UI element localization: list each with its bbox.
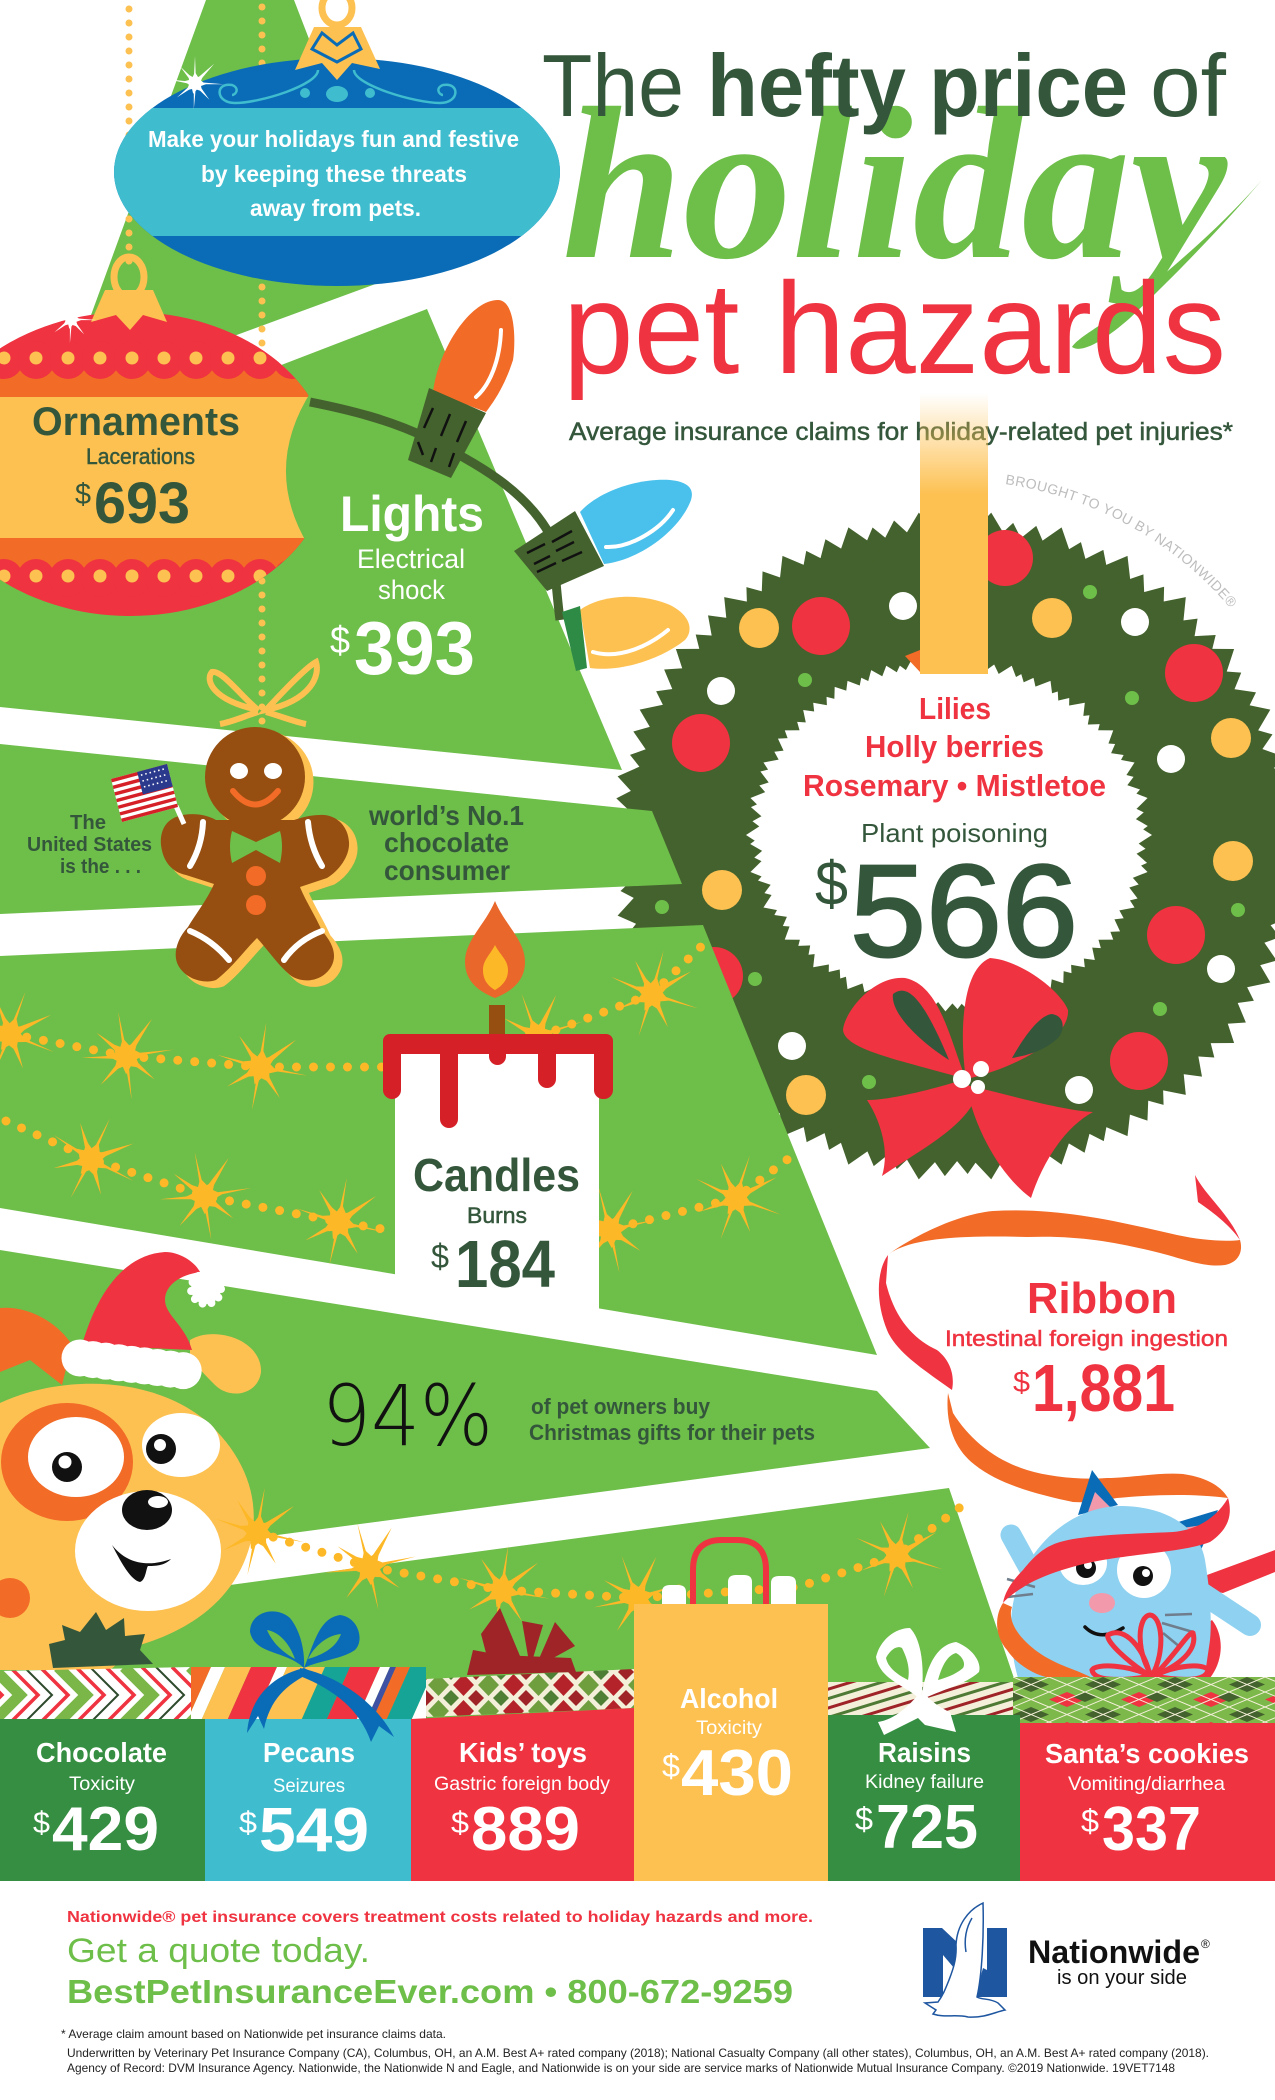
title word: holiday: holiday	[562, 64, 1228, 305]
fact text right: world’s No.1	[368, 800, 524, 831]
stat caption: of pet owners buy	[531, 1394, 711, 1419]
tree notch over ornament	[286, 390, 340, 545]
wreath hanging ribbon	[920, 393, 988, 674]
panel: chocolate	[0, 1719, 205, 1881]
lights wire	[310, 402, 560, 620]
panel: kids toys: Kids’ toys	[459, 1737, 587, 1768]
lights text: 393	[354, 606, 475, 690]
ribbon text: $	[1013, 1366, 1030, 1399]
panel: alcohol: $	[662, 1748, 680, 1784]
icon: bag handle	[693, 1540, 766, 1604]
cat body	[1011, 1506, 1211, 1678]
candle body	[395, 1038, 599, 1344]
ornament ring	[322, 0, 352, 25]
panel: chocolate: 429	[52, 1795, 159, 1864]
panel: raisins: $	[855, 1801, 873, 1837]
ornament body	[0, 312, 330, 616]
panel: alcohol: 430	[681, 1736, 793, 1809]
cat ears	[1078, 1470, 1218, 1557]
logo eagle	[925, 1903, 1005, 2017]
title line: The hefty price of: of	[1150, 36, 1227, 135]
panel: pecans: Seizures	[273, 1776, 345, 1797]
plant poisoning text: Rosemary • Mistletoe	[803, 768, 1106, 803]
dog left ear	[0, 1308, 72, 1385]
fact text right	[368, 800, 524, 886]
garlands with stars	[0, 937, 800, 1284]
ribbon text: 1,881	[1032, 1351, 1175, 1426]
candle text: 184	[455, 1227, 555, 1302]
panel: ribbon	[879, 1175, 1241, 1502]
alcohol box	[634, 1604, 828, 1881]
stat caption: Christmas gifts for their pets	[529, 1420, 815, 1445]
icon: sparkle	[169, 56, 224, 109]
logo N mark	[923, 1928, 1007, 1997]
plant poisoning text: Plant poisoning	[861, 818, 1048, 848]
panel: alcohol: Alcohol	[680, 1683, 778, 1714]
ornament message	[148, 126, 519, 221]
footer call to action: Nationwide® pet insurance covers treatment costs related to holiday hazards and more.	[67, 1909, 813, 1926]
title line: pet hazards: pet hazards	[563, 255, 1226, 401]
cat red ribbon behind	[1200, 1550, 1275, 1678]
ribbon red bend	[879, 1255, 953, 1390]
chevron wrap	[0, 1667, 191, 1723]
footer disclaimers: Agency of Record: DVM Insurance Agency. Nationwide, the Nationwide N and Eagle, and Nationwide is on your side are service marks of Nationwide Mutual Insurance Company. ©2019 Nationwide. 19VET7148	[67, 2061, 1175, 2075]
title	[542, 36, 1262, 401]
panel: pecans: $	[239, 1805, 257, 1840]
title line: The hefty price of	[542, 36, 1227, 135]
cat red bow	[1092, 1615, 1208, 1679]
stat caption	[529, 1394, 815, 1445]
ribbon text	[945, 1274, 1228, 1426]
footer call to action: BestPetInsuranceEver.com • 800-672-9259	[67, 1973, 793, 2010]
panel: gift stat	[322, 1367, 815, 1465]
icon: white gift bow	[876, 1628, 980, 1735]
ornament text: $	[75, 478, 91, 511]
panel: pecans: Pecans	[263, 1737, 355, 1768]
fact text left: United States	[27, 834, 152, 856]
icon: yellow bow	[210, 662, 317, 724]
footer logo	[923, 1903, 1210, 2017]
panel: santas cookies: 337	[1102, 1795, 1201, 1864]
fact text right: consumer	[384, 855, 510, 886]
panel: santas cookies: Santa’s cookies	[1045, 1738, 1249, 1769]
panel: pecans	[205, 1719, 411, 1881]
panel: chocolate: Chocolate	[36, 1737, 167, 1768]
gift wrap strips	[0, 1667, 1275, 1727]
candle wick	[489, 1005, 505, 1037]
icon: gingerbread man	[161, 727, 356, 986]
lights text: $	[330, 620, 350, 662]
icon: bottle tops	[662, 1575, 796, 1604]
panel: alcohol: Toxicity	[696, 1718, 763, 1739]
icon: candle flame	[465, 901, 525, 998]
fact text right: chocolate	[384, 827, 509, 858]
subtitle: Average insurance claims for holiday-related pet injuries*	[569, 418, 1233, 446]
panel: raisins: Kidney failure	[865, 1772, 984, 1793]
ornament cap	[91, 290, 167, 330]
panel: blue ornament	[110, 0, 565, 290]
ornament swirls	[220, 70, 455, 103]
ribbon text: Intestinal foreign ingestion	[945, 1326, 1228, 1351]
illustration: dog	[0, 1252, 261, 1670]
ribbon upper band	[888, 1210, 1241, 1266]
plant poisoning text: Lilies	[919, 691, 991, 726]
candle text: Burns	[467, 1203, 527, 1228]
ornament text: 693	[94, 471, 190, 536]
panel: raisins	[828, 1715, 1020, 1881]
ornament text	[32, 400, 240, 536]
panel: chocolate: $	[33, 1805, 50, 1840]
ornament text: Lacerations	[86, 444, 195, 469]
ribbon text: Ribbon	[1027, 1274, 1177, 1323]
logo wordmark: ®	[1201, 1937, 1210, 1951]
cat wrapping ribbon	[997, 1498, 1230, 1678]
stat number: 94%	[322, 1367, 493, 1465]
dog cheek	[0, 1578, 30, 1618]
icon: blue bulb	[514, 480, 692, 591]
dark spiky bow	[49, 1612, 153, 1668]
candle text	[413, 1149, 580, 1302]
footer call to action	[67, 1909, 813, 2010]
panel: raisins: Raisins	[878, 1737, 971, 1768]
dog muzzle	[75, 1490, 221, 1611]
striped wrap	[191, 1667, 426, 1719]
ribbon lower band	[947, 1393, 1228, 1502]
footer disclaimers: * Average claim amount based on Nationwide pet insurance claims data.	[61, 2027, 446, 2041]
icon: yellow bulb	[562, 597, 690, 671]
raisin stripe wrap	[827, 1682, 1017, 1718]
dog eyes	[1, 1403, 220, 1521]
argyle wrap	[1013, 1677, 1275, 1723]
ornament cap	[295, 27, 380, 80]
cat arms	[1011, 1535, 1250, 1625]
ornament ring	[114, 257, 144, 297]
ornament message: away from pets.	[250, 195, 421, 221]
panel: candle	[383, 901, 613, 1344]
lights text	[330, 486, 484, 690]
panel: chocolate: Toxicity	[69, 1774, 136, 1795]
ornament message: Make your holidays fun and festive	[148, 126, 519, 152]
wreath centre	[727, 634, 1171, 1036]
panel: raisins: 725	[876, 1793, 978, 1862]
plant poisoning text: 566	[850, 837, 1078, 984]
ornament message: by keeping these threats	[201, 161, 467, 187]
plant poisoning text	[803, 691, 1106, 984]
vertical dotted garlands	[129, 7, 262, 726]
candle text: Candles	[413, 1149, 580, 1201]
sponsor arc text: BROUGHT TO YOU BY NATIONWIDE®	[1006, 474, 1236, 606]
icon: sparkle	[47, 294, 97, 343]
panel: red ornament	[0, 257, 340, 616]
cat nose and mouth	[1007, 1579, 1193, 1647]
icon: dark red gift bow	[467, 1608, 576, 1675]
panel: alcohol	[634, 1540, 828, 1881]
footer disclaimers: Underwritten by Veterinary Pet Insurance Company (CA), Columbus, OH, an A.M. Best A+ rated company (2018); National Casualty Company (all other states), Columbus, OH, an A.M. Best A+ rated company (2018).	[67, 2046, 1209, 2060]
dog santa hat	[80, 1252, 221, 1371]
fact text left: is the . . .	[60, 856, 141, 878]
lights text: Lights	[340, 486, 484, 542]
panel: pecans: 549	[259, 1796, 369, 1865]
plant poisoning text: Holly berries	[865, 729, 1044, 764]
lights text: shock	[378, 575, 445, 605]
bottom garland	[206, 1480, 963, 1654]
panel: gingerbread fact	[27, 662, 524, 986]
panel: kids toys: $	[451, 1805, 469, 1840]
fact text left	[27, 812, 152, 878]
candle wax	[383, 1034, 613, 1128]
ornament body	[110, 55, 565, 290]
logo wordmark: Nationwide	[1028, 1934, 1200, 1970]
panel: santas cookies	[1020, 1723, 1275, 1881]
lights text: Electrical	[357, 544, 465, 574]
fact text left: The	[70, 812, 106, 834]
panel: lights	[310, 300, 692, 690]
ribbon red tip	[1195, 1175, 1240, 1240]
title line: The hefty price of: hefty price	[707, 36, 1128, 135]
panel: santas cookies: Vomiting/diarrhea	[1068, 1774, 1225, 1795]
illustration: cat	[997, 1470, 1275, 1679]
wreath	[571, 473, 1275, 1219]
icon: orange bulb	[408, 300, 514, 478]
logo tagline: is on your side	[1057, 1967, 1187, 1989]
dog head	[0, 1384, 254, 1670]
dog right ear	[190, 1334, 261, 1394]
panel: kids toys: 889	[471, 1795, 580, 1864]
footer disclaimers	[61, 2027, 1209, 2075]
wreath berries	[655, 530, 1253, 1115]
icon: american flag	[111, 764, 184, 824]
panel: kids toys: Gastric foreign body	[434, 1774, 611, 1795]
footer call to action: Get a quote today.	[67, 1932, 370, 1970]
candle text: $	[431, 1238, 449, 1276]
wreath bow	[843, 958, 1093, 1198]
panel: kids toys	[411, 1708, 634, 1881]
icon: blue gift bow	[247, 1611, 394, 1742]
diamond wrap	[426, 1669, 634, 1717]
christmas tree	[0, 0, 1030, 1725]
title line: The hefty price of: The	[542, 36, 684, 135]
cat eyes	[1059, 1541, 1171, 1598]
ornament text: Ornaments	[32, 400, 240, 444]
plant poisoning text: $	[815, 850, 848, 919]
panel: santas cookies: $	[1081, 1803, 1099, 1839]
